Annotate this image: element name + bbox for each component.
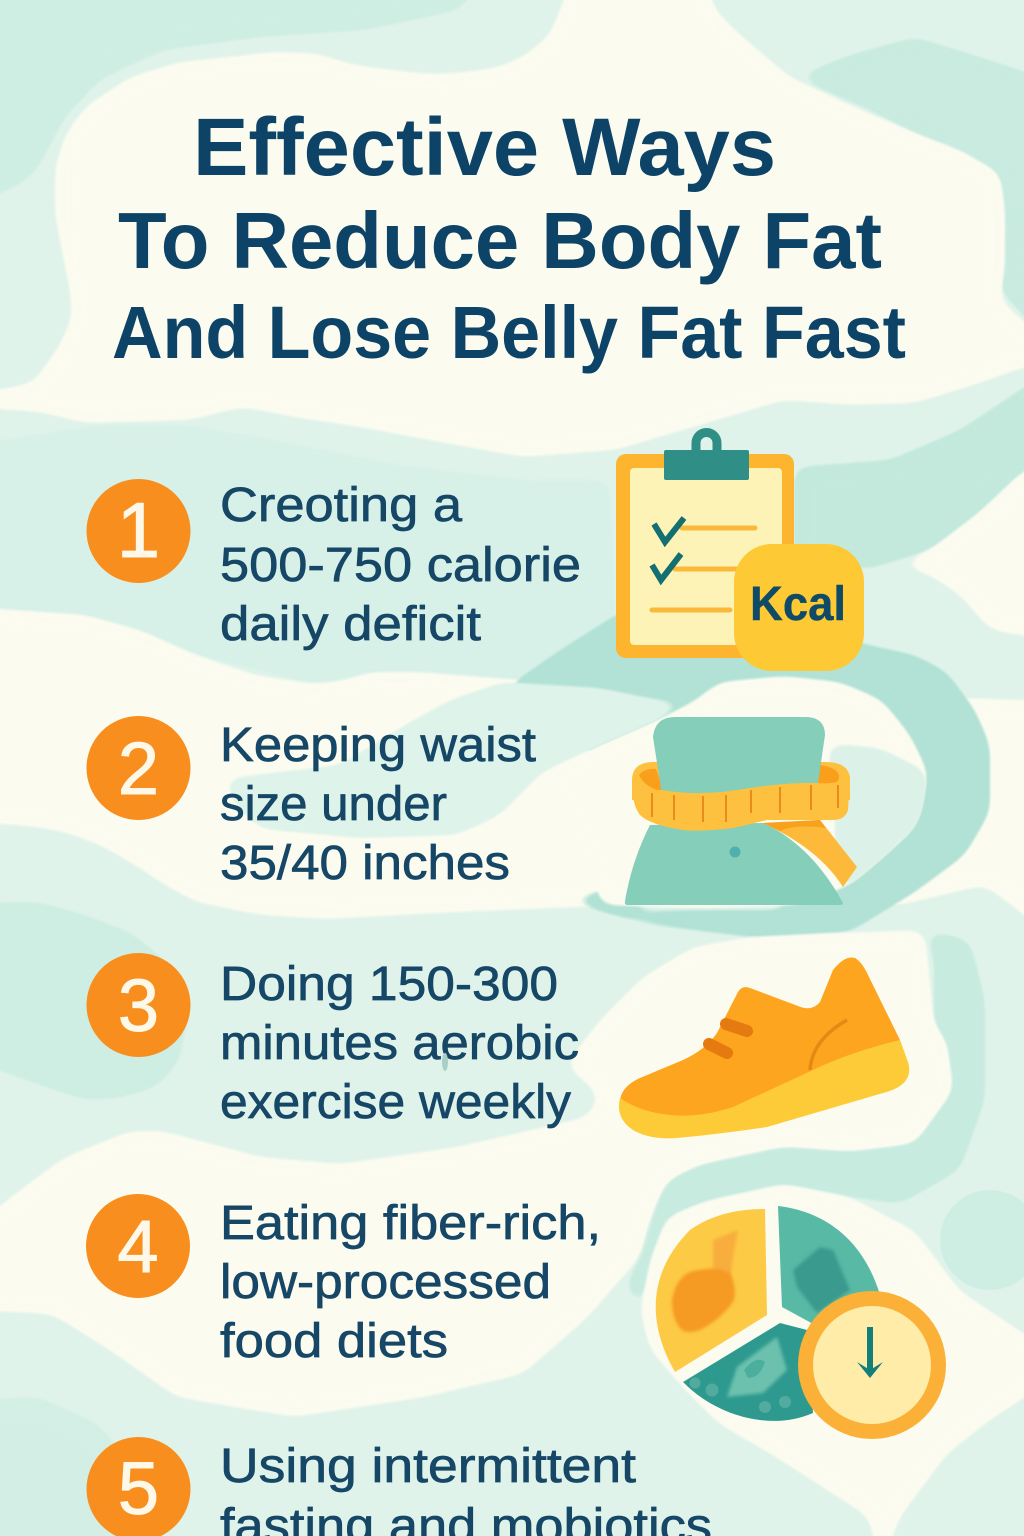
title	[112, 102, 906, 374]
icon: clipboard with kcal badge: Kcal	[750, 578, 846, 631]
title: Effective Ways	[193, 102, 776, 193]
number badge 3	[86, 953, 190, 1057]
text artefact over aerobic	[442, 1053, 448, 1071]
text 3: Doing 150-300	[220, 958, 558, 1011]
icon: running shoe	[619, 958, 909, 1138]
number badge 4	[86, 1194, 190, 1298]
text 2	[220, 719, 536, 890]
text 2: Keeping waist	[220, 719, 536, 772]
number badge 1: 1	[117, 486, 160, 574]
text 3: exercise weekly	[220, 1076, 571, 1129]
text 1: Creoting a	[220, 479, 462, 532]
text 2: 35/40 inches	[220, 837, 510, 890]
item 2: waist size	[86, 716, 857, 905]
text 1: 500-750 calorie	[220, 539, 581, 592]
title: To Reduce Body Fat	[118, 196, 882, 285]
text 1: daily deficit	[220, 598, 481, 651]
text 4	[220, 1197, 601, 1368]
text 5: Using intermittent	[220, 1440, 636, 1493]
number badge 3: 3	[118, 964, 159, 1047]
text 1	[220, 479, 581, 651]
text 3: minutes aerobic	[220, 1017, 579, 1070]
item 4: fiber-rich food	[86, 1194, 946, 1439]
icon: clipboard with kcal badge	[616, 432, 864, 671]
item 3: aerobic exercise	[86, 953, 909, 1138]
text 4: Eating fiber-rich,	[220, 1197, 601, 1250]
number badge 1	[86, 479, 190, 583]
number badge 4: 4	[117, 1205, 159, 1288]
text 3	[220, 958, 579, 1129]
text 2: size under	[220, 778, 447, 831]
item 5: intermittent fasting	[86, 1437, 712, 1536]
text 5	[220, 1440, 712, 1536]
icon: waist with tape measure	[625, 717, 857, 905]
icon: plate with clock	[656, 1206, 946, 1439]
title: And Lose Belly Fat Fast	[112, 291, 906, 374]
item 1: calorie deficit	[86, 432, 864, 671]
number badge 2: 2	[118, 727, 159, 810]
number badge 5: 5	[118, 1447, 159, 1530]
text 4: food diets	[220, 1315, 448, 1368]
number badge 2	[86, 716, 190, 820]
text 4: low-processed	[220, 1256, 551, 1309]
number badge 5	[86, 1437, 190, 1536]
